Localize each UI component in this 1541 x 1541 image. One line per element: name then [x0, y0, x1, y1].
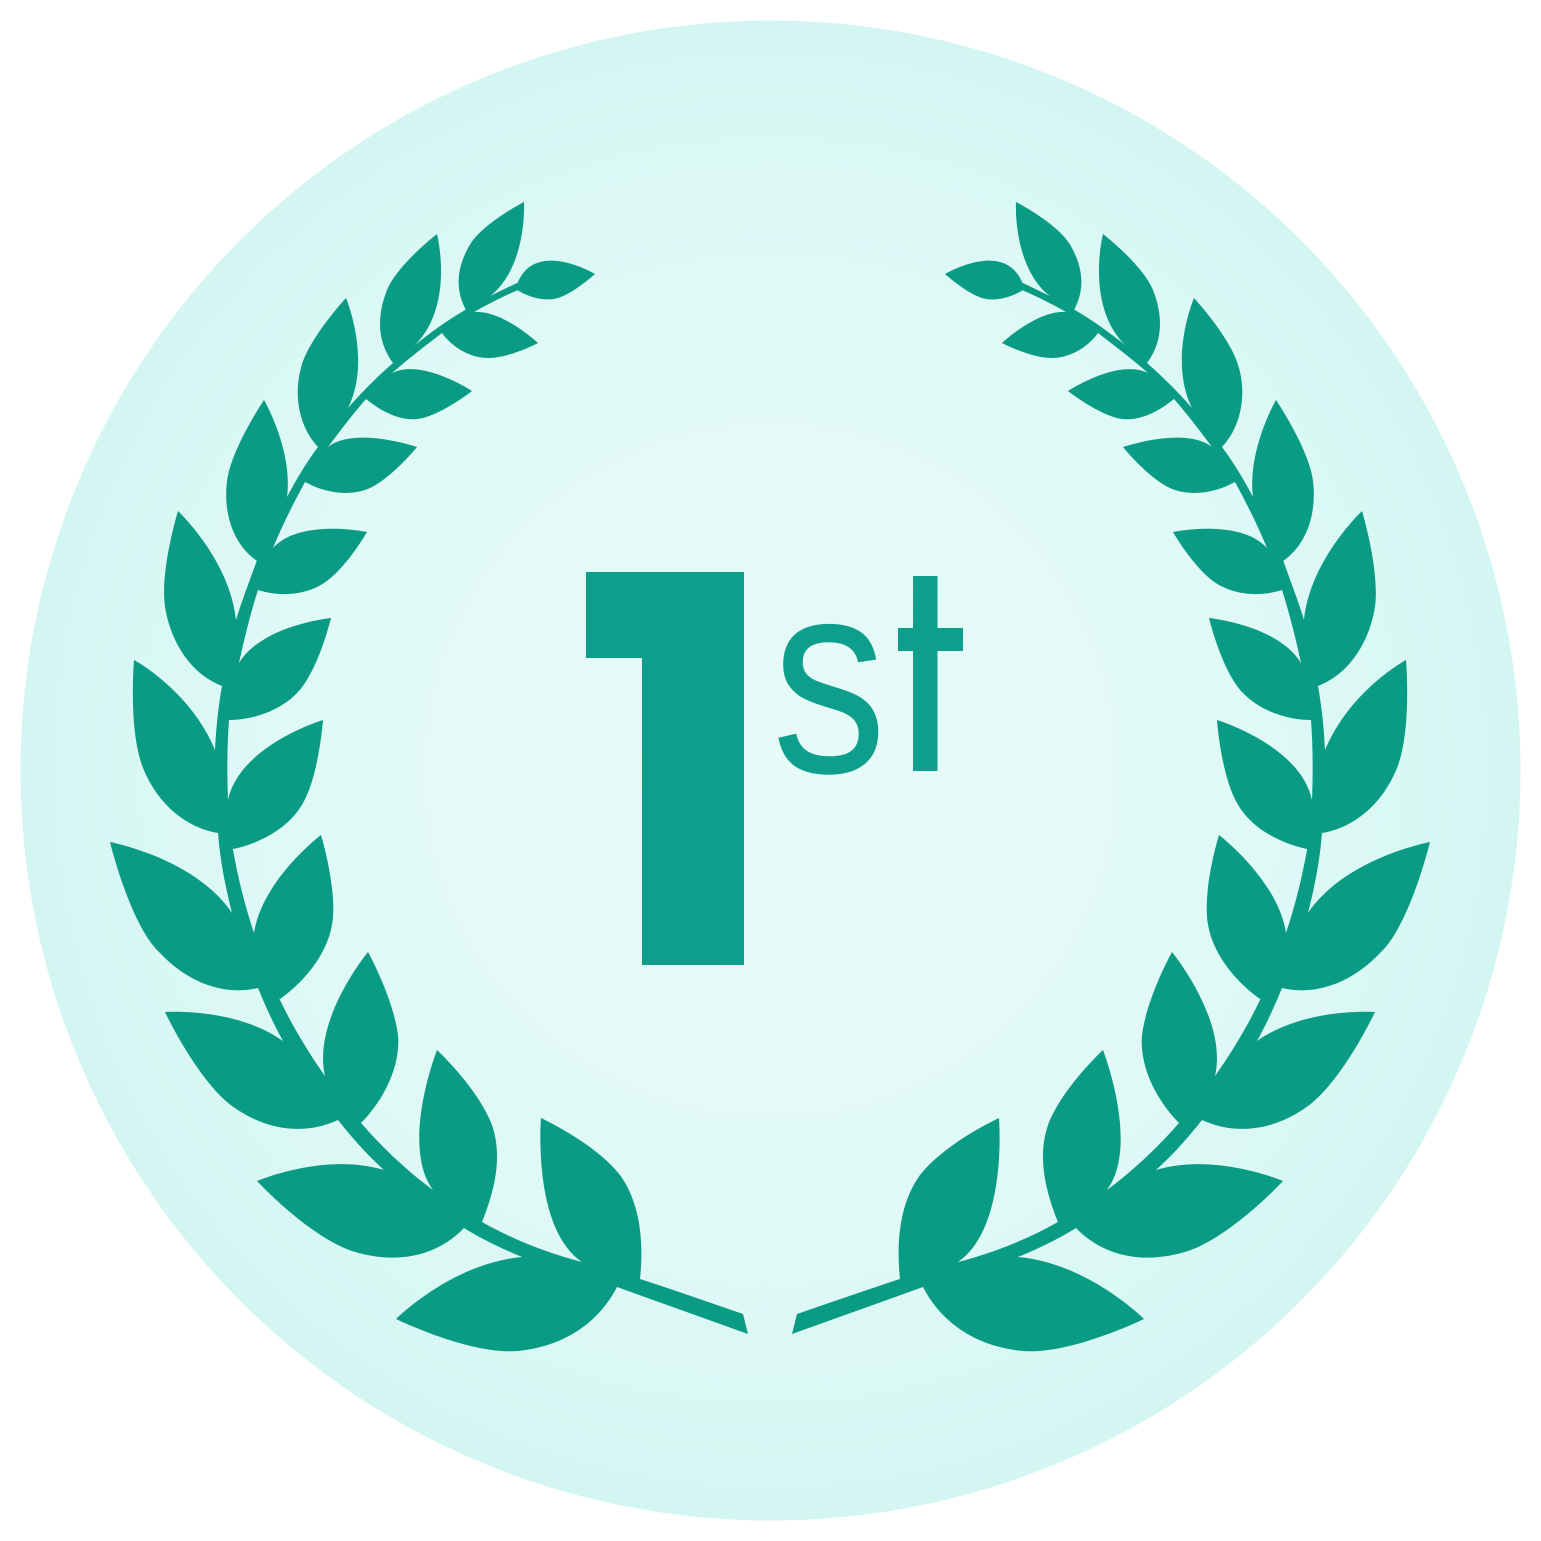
leaf 14 [110, 842, 260, 990]
right laurel branch [792, 202, 1430, 1351]
leaf 9 [164, 511, 241, 686]
leaf 6 [366, 369, 472, 419]
leaf 5 [298, 298, 358, 447]
ordinal suffix st [778, 576, 963, 775]
branch stem [215, 283, 748, 1334]
letter t [898, 576, 963, 771]
leaf 15 [245, 835, 333, 999]
letter t: t [888, 516, 967, 831]
leaf 4 [442, 312, 538, 358]
leaf 3 [380, 234, 441, 363]
numeral 1: 1 [560, 448, 957, 1086]
leaf 11 [224, 618, 331, 720]
leaf 16 [165, 1012, 338, 1129]
numeral 1 [586, 572, 744, 965]
leaf 19 [419, 1050, 497, 1222]
leaf 8 [305, 438, 417, 493]
left laurel branch [110, 202, 748, 1351]
leaf 12 [133, 660, 227, 833]
leaf 1 [459, 202, 524, 310]
leaf 7 [226, 400, 288, 561]
leaf 21 [540, 1118, 641, 1282]
letter s: s [772, 522, 887, 831]
leaf 17 [323, 952, 398, 1123]
leaf 20 [396, 1257, 617, 1351]
leaf 10 [255, 529, 367, 594]
leaf 2 [517, 261, 595, 299]
leaf 13 [218, 720, 323, 849]
leaf 18 [257, 1164, 464, 1258]
